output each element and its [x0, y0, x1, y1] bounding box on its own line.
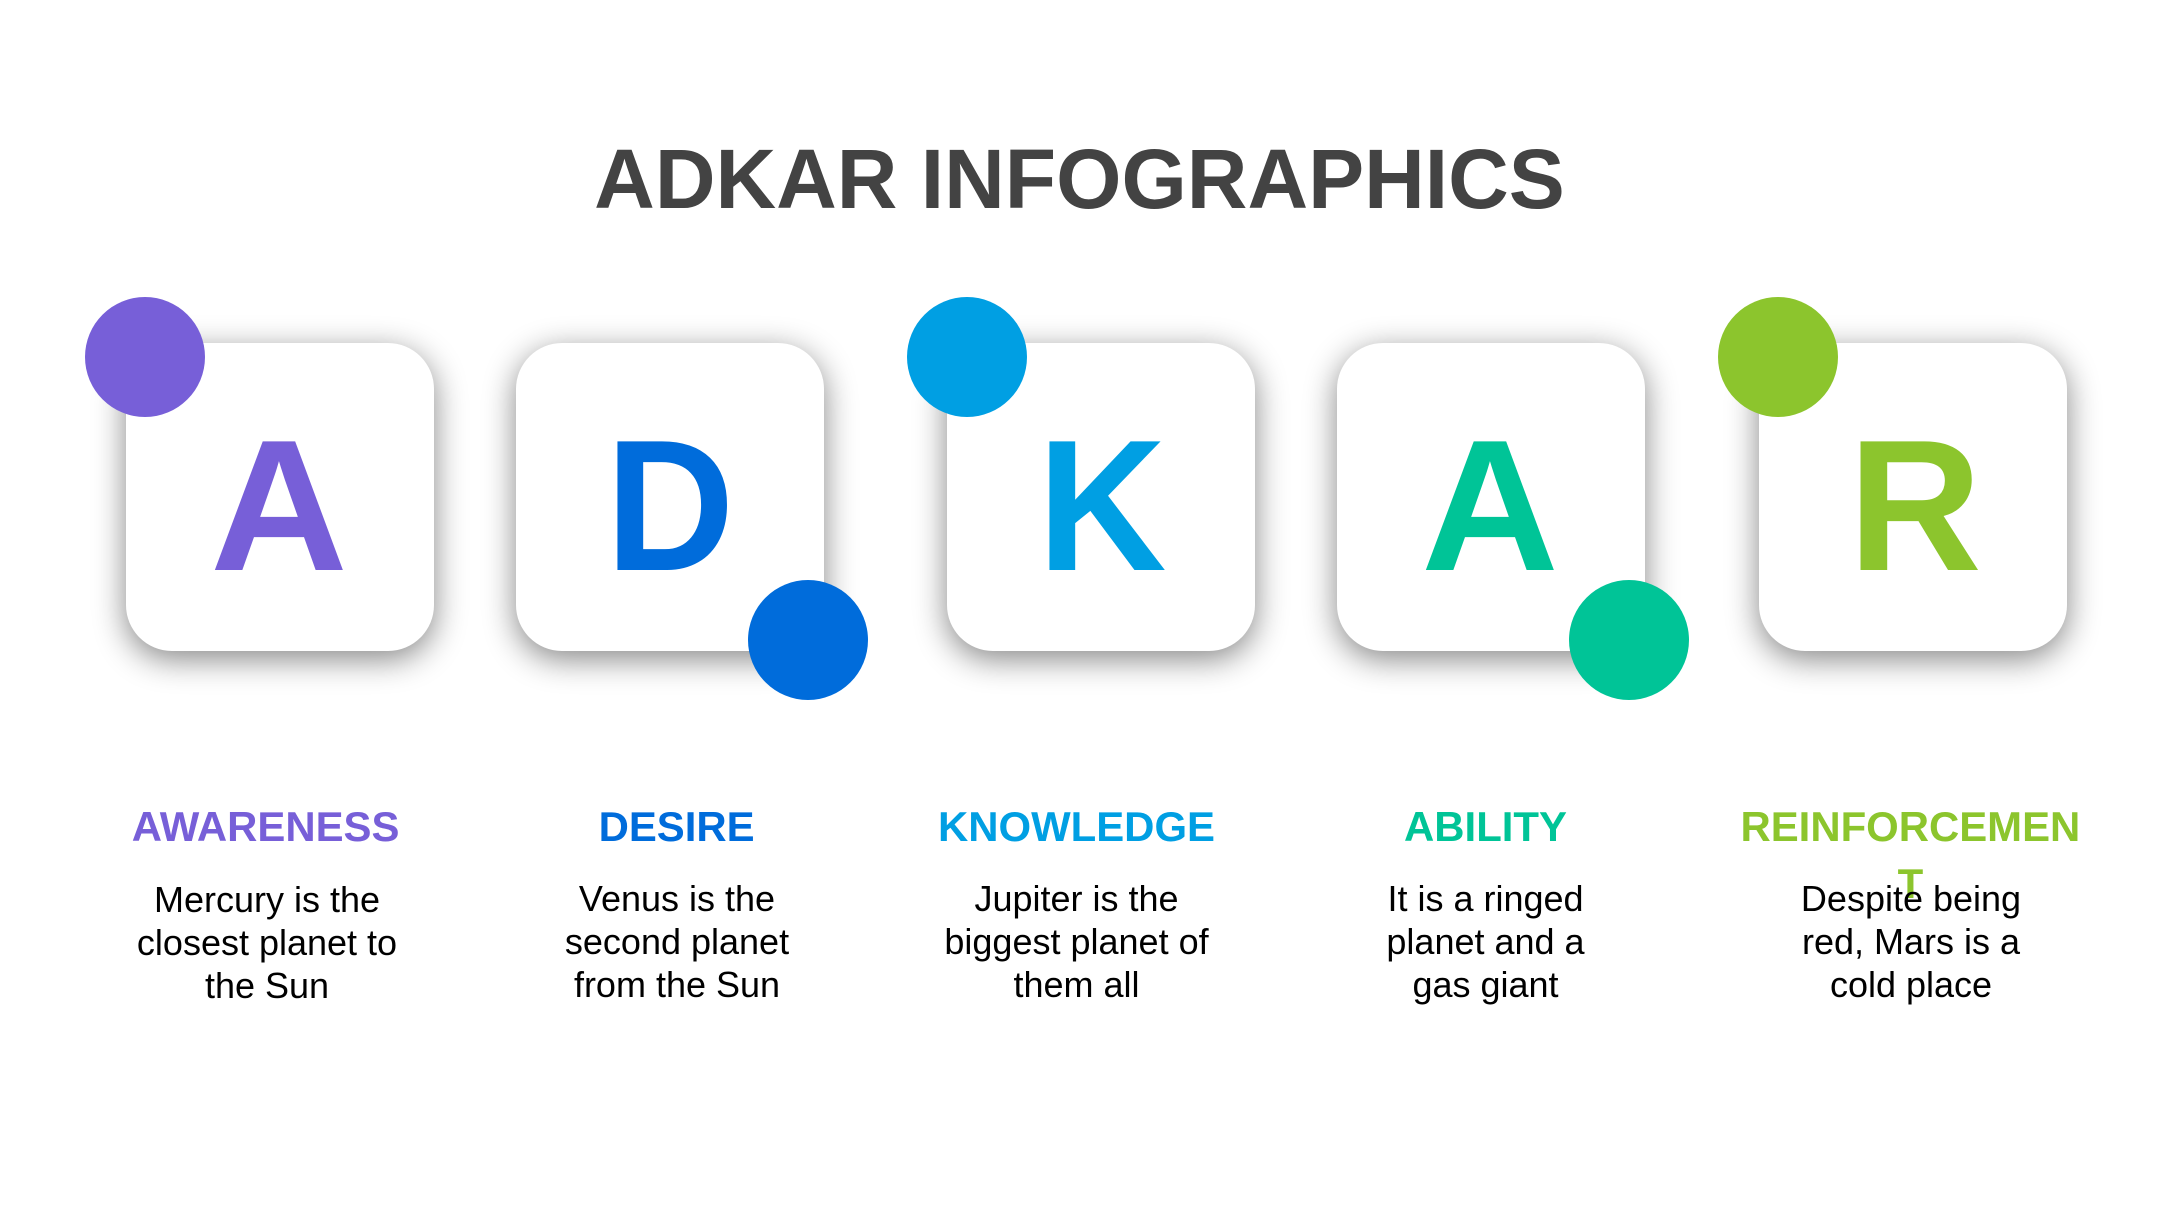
text: reinforcement description: Despite being	[1801, 878, 2021, 918]
text: ability description: It is a ringed	[1387, 878, 1584, 918]
heading: reinforcement	[1740, 803, 2080, 907]
card: R: R	[1848, 401, 1981, 610]
text: desire description: Venus is the	[579, 878, 775, 918]
card: A (ability)	[1336, 343, 1644, 651]
text: reinforcement description	[1801, 878, 2021, 1005]
card: D: D	[605, 401, 734, 610]
text: awareness description: the Sun	[205, 965, 329, 1006]
icon: purple circle	[85, 297, 205, 417]
text: knowledge description: them all	[1013, 964, 1140, 1005]
icon: green circle	[1569, 580, 1689, 700]
heading: awareness: AWARENESS	[132, 803, 399, 850]
heading: reinforcement: T	[1898, 860, 1923, 907]
text: awareness description: closest planet to	[137, 922, 397, 963]
icon: cyan circle	[907, 297, 1027, 417]
text: desire description	[565, 878, 789, 1005]
text: reinforcement description: red, Mars is a	[1802, 921, 2020, 962]
card: A	[126, 343, 434, 651]
text: desire description: from the Sun	[574, 964, 780, 1005]
icon: blue circle	[748, 580, 868, 700]
text: desire description: second planet	[565, 921, 789, 962]
card: K: K	[1037, 401, 1166, 610]
text: knowledge description: biggest planet of	[944, 921, 1209, 962]
text: reinforcement description: cold place	[1830, 964, 1992, 1005]
title: ADKAR INFOGRAPHICS	[594, 132, 1565, 226]
card: A (ability): A	[1421, 401, 1558, 610]
card: A: A	[210, 401, 348, 610]
card: D	[516, 343, 824, 651]
text: awareness description: Mercury is the	[154, 878, 380, 920]
text: ability description: planet and a	[1386, 921, 1585, 962]
text: ability description: gas giant	[1412, 964, 1559, 1005]
text: knowledge description	[944, 878, 1209, 1005]
text: ability description	[1386, 878, 1585, 1005]
card: R	[1758, 343, 2066, 651]
text: knowledge description: Jupiter is the	[974, 878, 1179, 918]
icon: lime circle	[1718, 297, 1838, 417]
card: K	[947, 343, 1255, 651]
heading: desire: DESIRE	[599, 803, 755, 850]
heading: ability: ABILITY	[1404, 803, 1567, 850]
heading: reinforcement: REINFORCEMEN	[1740, 803, 2080, 850]
heading: knowledge: KNOWLEDGE	[938, 803, 1215, 850]
text: awareness description	[137, 878, 397, 1006]
